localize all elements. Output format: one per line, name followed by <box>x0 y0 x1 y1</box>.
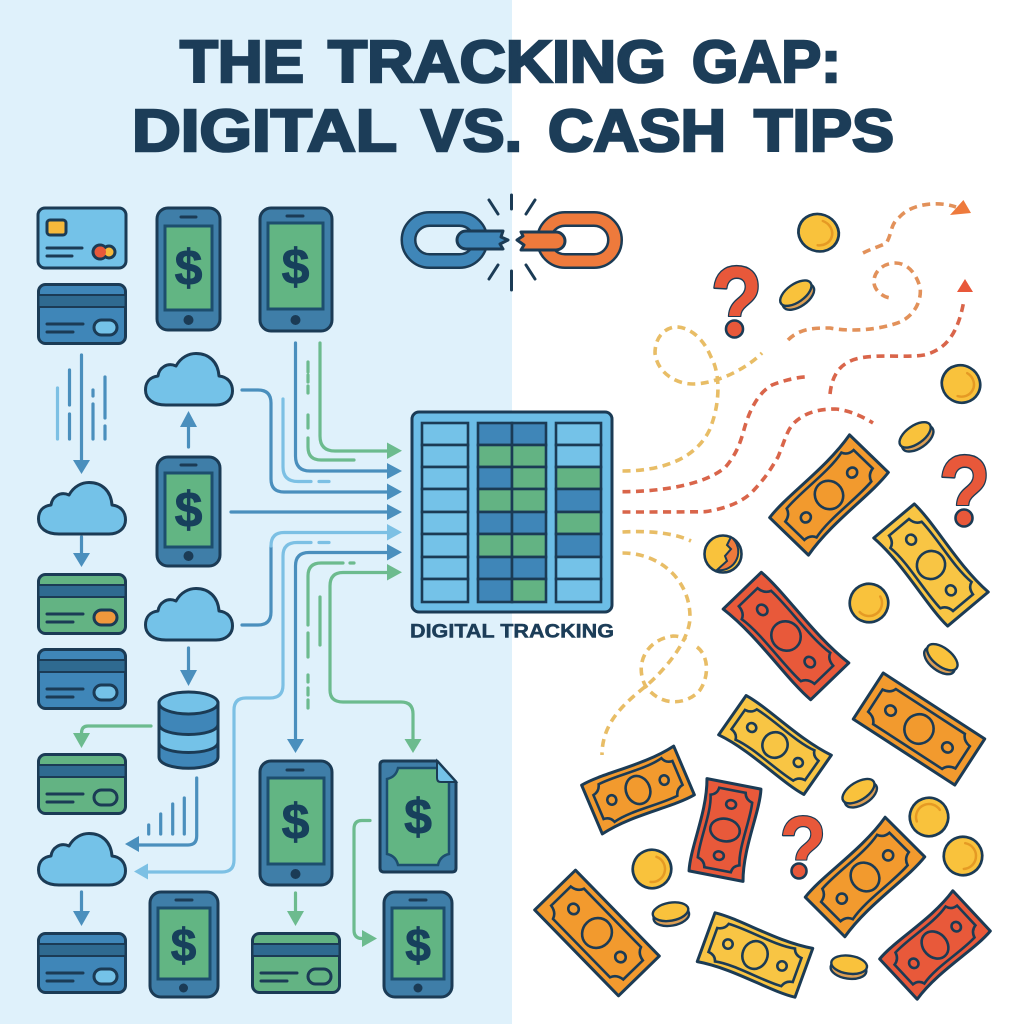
icon: cloud center lower <box>146 588 232 640</box>
icon: phone 5: $ <box>171 919 196 971</box>
icon: green card <box>38 754 126 814</box>
title: THE <box>180 29 304 95</box>
icon: orange banknote <box>535 870 659 996</box>
icon: coin <box>935 358 987 410</box>
dashed arrow: orange top <box>863 200 971 253</box>
icon: red banknote <box>723 572 849 700</box>
panel: digital payments flow <box>38 208 456 997</box>
dashed path: yellow loop down <box>602 553 690 755</box>
table cells <box>422 423 601 602</box>
title: TIPS <box>754 98 894 164</box>
panel: cash tips scatter <box>535 200 991 1000</box>
icon: database <box>159 692 218 768</box>
icon: phone 5 <box>150 892 218 997</box>
icon: broken chain link <box>408 195 615 290</box>
icon: flat coin <box>838 774 881 813</box>
icon: coin <box>941 834 985 878</box>
icon: green card bottom <box>252 934 340 992</box>
icon: phone 2 <box>260 208 332 331</box>
background: digital side <box>0 0 512 1024</box>
icon: cloud left <box>38 482 126 534</box>
icon: yellow banknote <box>718 695 832 795</box>
icon: blue card <box>38 284 126 344</box>
dashed path: red curve one <box>622 377 808 492</box>
icon: orange banknote <box>581 745 695 835</box>
icon: cloud upper center <box>146 354 232 405</box>
arrow: cards to cloud with data rain <box>58 355 105 474</box>
icon: phone 6 <box>384 892 452 997</box>
arrow: phone up to cloud <box>180 411 197 447</box>
icon: question mark 1: ? <box>711 246 762 359</box>
icon: yellow banknote <box>697 912 813 998</box>
arrow: database to cloud with bars <box>125 778 197 852</box>
icon: cracked coin <box>704 536 742 572</box>
dashed path: yellow loop to top <box>622 327 762 471</box>
title: TRACKING <box>328 29 666 95</box>
icon: flat coin <box>829 953 868 981</box>
dashed arrow: red upward <box>830 279 973 394</box>
icon: flat coin <box>895 417 938 457</box>
icon: question mark 2: ? <box>939 435 990 548</box>
icon: phone 1 <box>157 208 220 330</box>
icon: flat coin <box>920 639 962 679</box>
title: VS. <box>421 98 522 164</box>
icon: banknote document <box>380 761 456 872</box>
icon: banknote document: $ <box>404 789 432 845</box>
icon: yellow banknote <box>873 503 989 627</box>
dashed path: yellow loop circle <box>641 636 706 702</box>
icon: cloud lower left <box>38 834 126 885</box>
icon: blue card <box>38 650 126 708</box>
icon: question mark 3: ? <box>780 799 826 897</box>
icon: red banknote <box>879 890 991 1000</box>
icon: phone 2: $ <box>282 239 310 295</box>
arrow: phone to green card <box>287 893 304 926</box>
title: CASH <box>548 98 726 164</box>
icon: question mark 1 <box>713 264 759 339</box>
title: GAP: <box>692 29 841 95</box>
title <box>132 29 894 164</box>
icon: phone 6: $ <box>405 919 431 971</box>
chart: digital tracking table <box>412 412 612 612</box>
arrow: cloud to blue card <box>73 892 90 926</box>
dashed path: red curve two <box>622 409 873 512</box>
icon: phone 4 <box>260 761 332 885</box>
icon: credit card front <box>38 208 126 268</box>
icon: flat coin <box>776 275 819 315</box>
icon: question mark 3 <box>782 815 824 880</box>
icon: coin <box>843 577 895 629</box>
dashed path: short yellow <box>622 532 691 541</box>
arrow: document to phone <box>354 820 377 947</box>
icon: coin <box>793 208 844 257</box>
icon: blue card bottom <box>38 934 126 992</box>
arrow: cloud to green card <box>73 537 90 567</box>
icon: orange banknote <box>853 673 985 785</box>
icon: red banknote <box>688 778 762 882</box>
arrows: flows into tracking table <box>134 343 422 880</box>
icon: phone 3: $ <box>175 482 203 538</box>
dashed path: orange swirl <box>788 263 920 340</box>
icon: phone 1: $ <box>175 240 203 296</box>
icon: coin <box>904 792 954 842</box>
arrow: database to green card <box>73 726 151 748</box>
icon: phone 4: $ <box>282 794 310 850</box>
icon: flat coin <box>651 900 691 929</box>
icon: coin <box>627 844 677 894</box>
title: DIGITAL <box>132 98 397 164</box>
label: digital tracking: DIGITAL TRACKING <box>410 622 614 642</box>
arrow: cloud to database <box>180 648 197 686</box>
icon: phone 3 <box>157 457 220 566</box>
icon: orange banknote <box>805 817 925 937</box>
icon: question mark 2 <box>941 454 987 528</box>
icon: green card with orange pill <box>38 574 126 634</box>
icon: orange banknote <box>769 434 889 556</box>
